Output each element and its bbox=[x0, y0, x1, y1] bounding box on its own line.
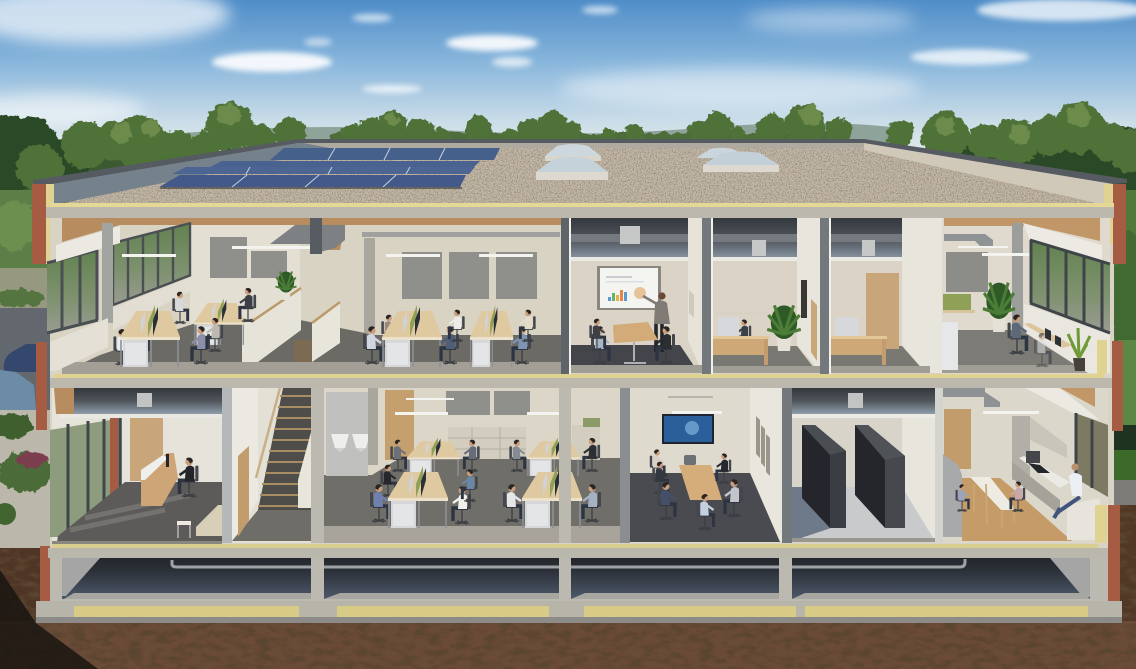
rear chair bbox=[684, 455, 696, 465]
whiteboard bbox=[597, 266, 661, 310]
right grounds: trees, lawn and gravel bbox=[1100, 190, 1136, 508]
basement bbox=[50, 558, 1108, 603]
intermediate slab bbox=[50, 374, 1112, 388]
person front left bbox=[113, 329, 131, 365]
people left bbox=[650, 449, 664, 480]
cabinets right bbox=[572, 425, 600, 460]
person seated left bbox=[380, 465, 396, 497]
upper floor bbox=[47, 217, 1110, 376]
person right desks 2 bbox=[381, 315, 397, 347]
building shell bbox=[32, 184, 1126, 603]
floor bbox=[62, 320, 561, 373]
void two bbox=[324, 558, 559, 599]
parking lot bbox=[0, 308, 52, 412]
windows bbox=[1030, 240, 1110, 333]
brick left lower bbox=[40, 546, 50, 601]
person bbox=[841, 319, 855, 350]
room: private office one bbox=[712, 218, 820, 373]
presenter bbox=[643, 292, 670, 352]
duct bbox=[232, 225, 345, 252]
person far right bbox=[513, 326, 531, 364]
counter bbox=[1019, 456, 1070, 488]
door bbox=[944, 409, 971, 469]
desk rear right bbox=[527, 438, 580, 476]
ceiling edge bbox=[60, 414, 222, 418]
gravel surface bbox=[60, 148, 1100, 204]
clouds bbox=[0, 0, 1136, 126]
brick right lower bbox=[1108, 505, 1120, 601]
picture bbox=[801, 280, 807, 318]
window bbox=[1075, 413, 1108, 497]
right parapet bbox=[864, 142, 1113, 204]
rack two bbox=[855, 425, 905, 528]
skylight front left bbox=[536, 157, 608, 180]
concrete column bbox=[368, 388, 378, 465]
gravel course bbox=[36, 617, 1122, 623]
person rear left two bbox=[509, 440, 525, 472]
brick right middle bbox=[1112, 341, 1123, 431]
staircase bbox=[256, 388, 311, 510]
person front left bbox=[370, 484, 388, 522]
desk front left bbox=[388, 466, 448, 528]
brick strip bbox=[110, 418, 118, 503]
people right bbox=[717, 453, 731, 484]
room: kitchen bbox=[942, 388, 1108, 543]
person left bbox=[956, 484, 968, 511]
pavement and planting bbox=[0, 410, 52, 550]
people at table bbox=[591, 326, 609, 364]
insulation left bbox=[46, 184, 54, 264]
person right desks 4 bbox=[449, 310, 465, 342]
skylight rear right bbox=[696, 148, 745, 158]
microwave bbox=[1026, 451, 1040, 463]
acoustic panels bbox=[210, 237, 537, 299]
desk rear bbox=[194, 298, 245, 345]
lower partitions bbox=[222, 388, 943, 543]
table bbox=[613, 322, 658, 363]
pipes bbox=[172, 559, 965, 567]
brick left upper bbox=[32, 184, 46, 264]
table bbox=[679, 465, 722, 500]
shrub bottom bbox=[0, 503, 16, 525]
light bars bbox=[958, 246, 1037, 256]
lower floor bbox=[50, 388, 1108, 544]
ceiling column stub bbox=[310, 218, 322, 254]
person front right 2 bbox=[207, 318, 223, 352]
solar panel array bbox=[159, 148, 500, 188]
floor bands bbox=[64, 593, 1090, 599]
person rear desk left bbox=[172, 292, 188, 324]
room: reception bbox=[50, 388, 222, 544]
shrub top bbox=[0, 413, 32, 439]
shrub cluster bbox=[0, 452, 53, 492]
low wall front bbox=[50, 318, 108, 371]
side table bbox=[177, 521, 191, 538]
binders bbox=[583, 418, 600, 427]
soil sides bbox=[0, 505, 1136, 669]
timber ceiling bbox=[62, 217, 561, 250]
brick right upper bbox=[1113, 184, 1126, 264]
void four bbox=[792, 558, 1090, 599]
ceiling void bbox=[792, 388, 935, 414]
reception desk bbox=[141, 453, 178, 506]
flowering shrub bbox=[17, 452, 47, 468]
side wall bbox=[902, 418, 935, 541]
insulation bands bbox=[74, 606, 1088, 617]
lower cabinets bbox=[1012, 462, 1060, 515]
insulation bbox=[1095, 505, 1107, 543]
monitor bbox=[835, 317, 858, 336]
skylight rear left bbox=[545, 144, 601, 161]
structural column bbox=[102, 223, 113, 323]
person front left 2 bbox=[132, 320, 148, 354]
floor bbox=[57, 482, 222, 542]
left parapet bbox=[52, 142, 335, 203]
wall cabinets bbox=[1030, 417, 1067, 458]
glass facade bbox=[50, 418, 122, 537]
skylight front right bbox=[695, 152, 779, 172]
soffit bbox=[1023, 223, 1102, 262]
monitors bbox=[1045, 328, 1061, 347]
floor bbox=[324, 458, 620, 541]
acoustic panels bbox=[446, 391, 530, 415]
pipe run bbox=[362, 232, 560, 237]
stair treads bbox=[294, 340, 312, 362]
void one bbox=[62, 558, 311, 599]
duct bbox=[944, 234, 993, 248]
tall unit bbox=[1012, 416, 1030, 480]
person bbox=[737, 319, 751, 350]
room: open office lower bbox=[324, 388, 620, 543]
low wall rear bbox=[113, 276, 193, 330]
desk bbox=[712, 336, 769, 365]
rear wall bbox=[190, 225, 300, 325]
background treeline bbox=[0, 102, 1136, 210]
side door bbox=[811, 299, 817, 361]
car: blue sedan bbox=[4, 344, 38, 372]
person far right 2 bbox=[520, 310, 536, 342]
rack one bbox=[802, 425, 846, 528]
soffit bbox=[56, 226, 120, 262]
washroom bbox=[326, 392, 370, 476]
upper partition posts bbox=[561, 218, 831, 376]
shrubs bbox=[0, 289, 44, 307]
back parapet bbox=[298, 139, 864, 154]
side door bbox=[238, 446, 249, 537]
shelf bbox=[716, 312, 766, 315]
person right 2 bbox=[725, 479, 743, 517]
desk bbox=[830, 336, 887, 365]
upper light bar bbox=[668, 396, 713, 398]
floor edge bbox=[792, 538, 935, 542]
desk rear left bbox=[407, 438, 460, 476]
roof bbox=[33, 139, 1127, 204]
window wall front bbox=[47, 250, 98, 333]
room: server bbox=[792, 388, 935, 543]
side wall pictures bbox=[689, 290, 694, 318]
soil shadow bbox=[0, 570, 98, 669]
duct bbox=[943, 388, 1000, 407]
floor bbox=[792, 487, 935, 541]
receptionist bbox=[180, 458, 198, 497]
road and lawn strip bbox=[0, 268, 52, 308]
person seated right bbox=[462, 470, 478, 502]
side wall right bbox=[1050, 558, 1090, 597]
desk front right bbox=[522, 466, 582, 528]
person at table rear bbox=[589, 319, 605, 351]
person rear right bbox=[464, 440, 480, 472]
foundation bbox=[36, 601, 1122, 623]
room: presentation bbox=[570, 218, 702, 373]
person right bbox=[1011, 481, 1025, 512]
potted plant bbox=[1068, 328, 1090, 371]
stair guard right bbox=[312, 302, 340, 362]
person bbox=[1008, 315, 1026, 354]
light bars bbox=[983, 411, 1039, 414]
screen bbox=[662, 414, 714, 444]
person left 2 bbox=[652, 462, 668, 494]
roof slab bbox=[46, 203, 1114, 218]
monitor bbox=[718, 317, 739, 336]
desk bbox=[1024, 323, 1072, 348]
left grounds: trees, parking and shrubs bbox=[0, 190, 53, 550]
wall pictures bbox=[756, 416, 770, 476]
plant bbox=[983, 283, 1015, 332]
person front left two bbox=[503, 484, 521, 522]
void three bbox=[571, 558, 779, 599]
person on bench bbox=[1054, 463, 1082, 518]
cabinets bbox=[448, 427, 526, 459]
air unit bbox=[137, 393, 152, 407]
wall soffit bbox=[1025, 388, 1100, 420]
stair guard left bbox=[242, 288, 301, 362]
low wall bbox=[1024, 304, 1110, 373]
person right desks 3 bbox=[441, 326, 459, 364]
room: open office upper right bbox=[942, 217, 1110, 375]
timber ceiling bbox=[944, 217, 1100, 241]
light bars bbox=[395, 398, 560, 415]
insulation right bbox=[1104, 184, 1113, 244]
wood floor bbox=[962, 478, 1072, 541]
light bar bbox=[672, 411, 722, 414]
stair hall bbox=[232, 388, 311, 543]
chair bbox=[1034, 333, 1050, 367]
room: meeting bbox=[630, 388, 782, 543]
plant bbox=[767, 305, 801, 351]
ground slab bbox=[48, 544, 1108, 558]
room: open office upper left bbox=[47, 217, 562, 375]
table bbox=[970, 477, 1016, 528]
person rear desk right bbox=[240, 288, 256, 322]
sky bbox=[0, 0, 1136, 160]
person front right bbox=[453, 486, 471, 524]
ceiling void bbox=[74, 388, 222, 414]
edge insulation bbox=[1097, 340, 1107, 374]
brick left middle bbox=[36, 342, 47, 430]
person rear left bbox=[390, 440, 406, 472]
timber soffit bbox=[54, 388, 74, 414]
plant on landing bbox=[276, 272, 296, 300]
room: private office two bbox=[830, 218, 942, 373]
desk cluster bbox=[382, 305, 442, 367]
small desk cluster bbox=[470, 305, 513, 367]
person rear right two bbox=[584, 438, 600, 472]
fridge bbox=[942, 453, 962, 537]
soil under building bbox=[0, 621, 1136, 669]
door bbox=[866, 273, 899, 349]
person right desks bbox=[363, 326, 381, 364]
bench box bbox=[1067, 498, 1100, 540]
person front right two bbox=[583, 484, 601, 522]
cabinet bbox=[942, 322, 958, 370]
timber soffit bbox=[1060, 388, 1095, 407]
back wall concrete column bbox=[364, 238, 375, 333]
floor shadow bbox=[792, 487, 840, 541]
floor bbox=[942, 330, 1105, 372]
car: light blue sedan bbox=[0, 370, 36, 410]
acoustic panel bbox=[946, 252, 988, 292]
ceiling edge bbox=[792, 414, 935, 418]
column bbox=[1012, 223, 1023, 333]
cooktop bbox=[1028, 463, 1050, 473]
distant hills bbox=[160, 123, 900, 150]
window wall rear bbox=[113, 223, 191, 305]
person front bbox=[696, 494, 714, 530]
rear workstation bbox=[943, 294, 971, 310]
sofa bbox=[196, 505, 222, 536]
light bars bbox=[122, 246, 533, 257]
desk front bbox=[120, 305, 180, 367]
air unit bbox=[848, 393, 863, 408]
door bbox=[130, 418, 163, 481]
person at table right bbox=[657, 326, 675, 364]
door bbox=[385, 390, 414, 460]
side wall left bbox=[62, 558, 100, 596]
parapet cap bbox=[33, 139, 1127, 184]
person front right bbox=[192, 326, 210, 364]
person left 3 bbox=[657, 482, 675, 520]
